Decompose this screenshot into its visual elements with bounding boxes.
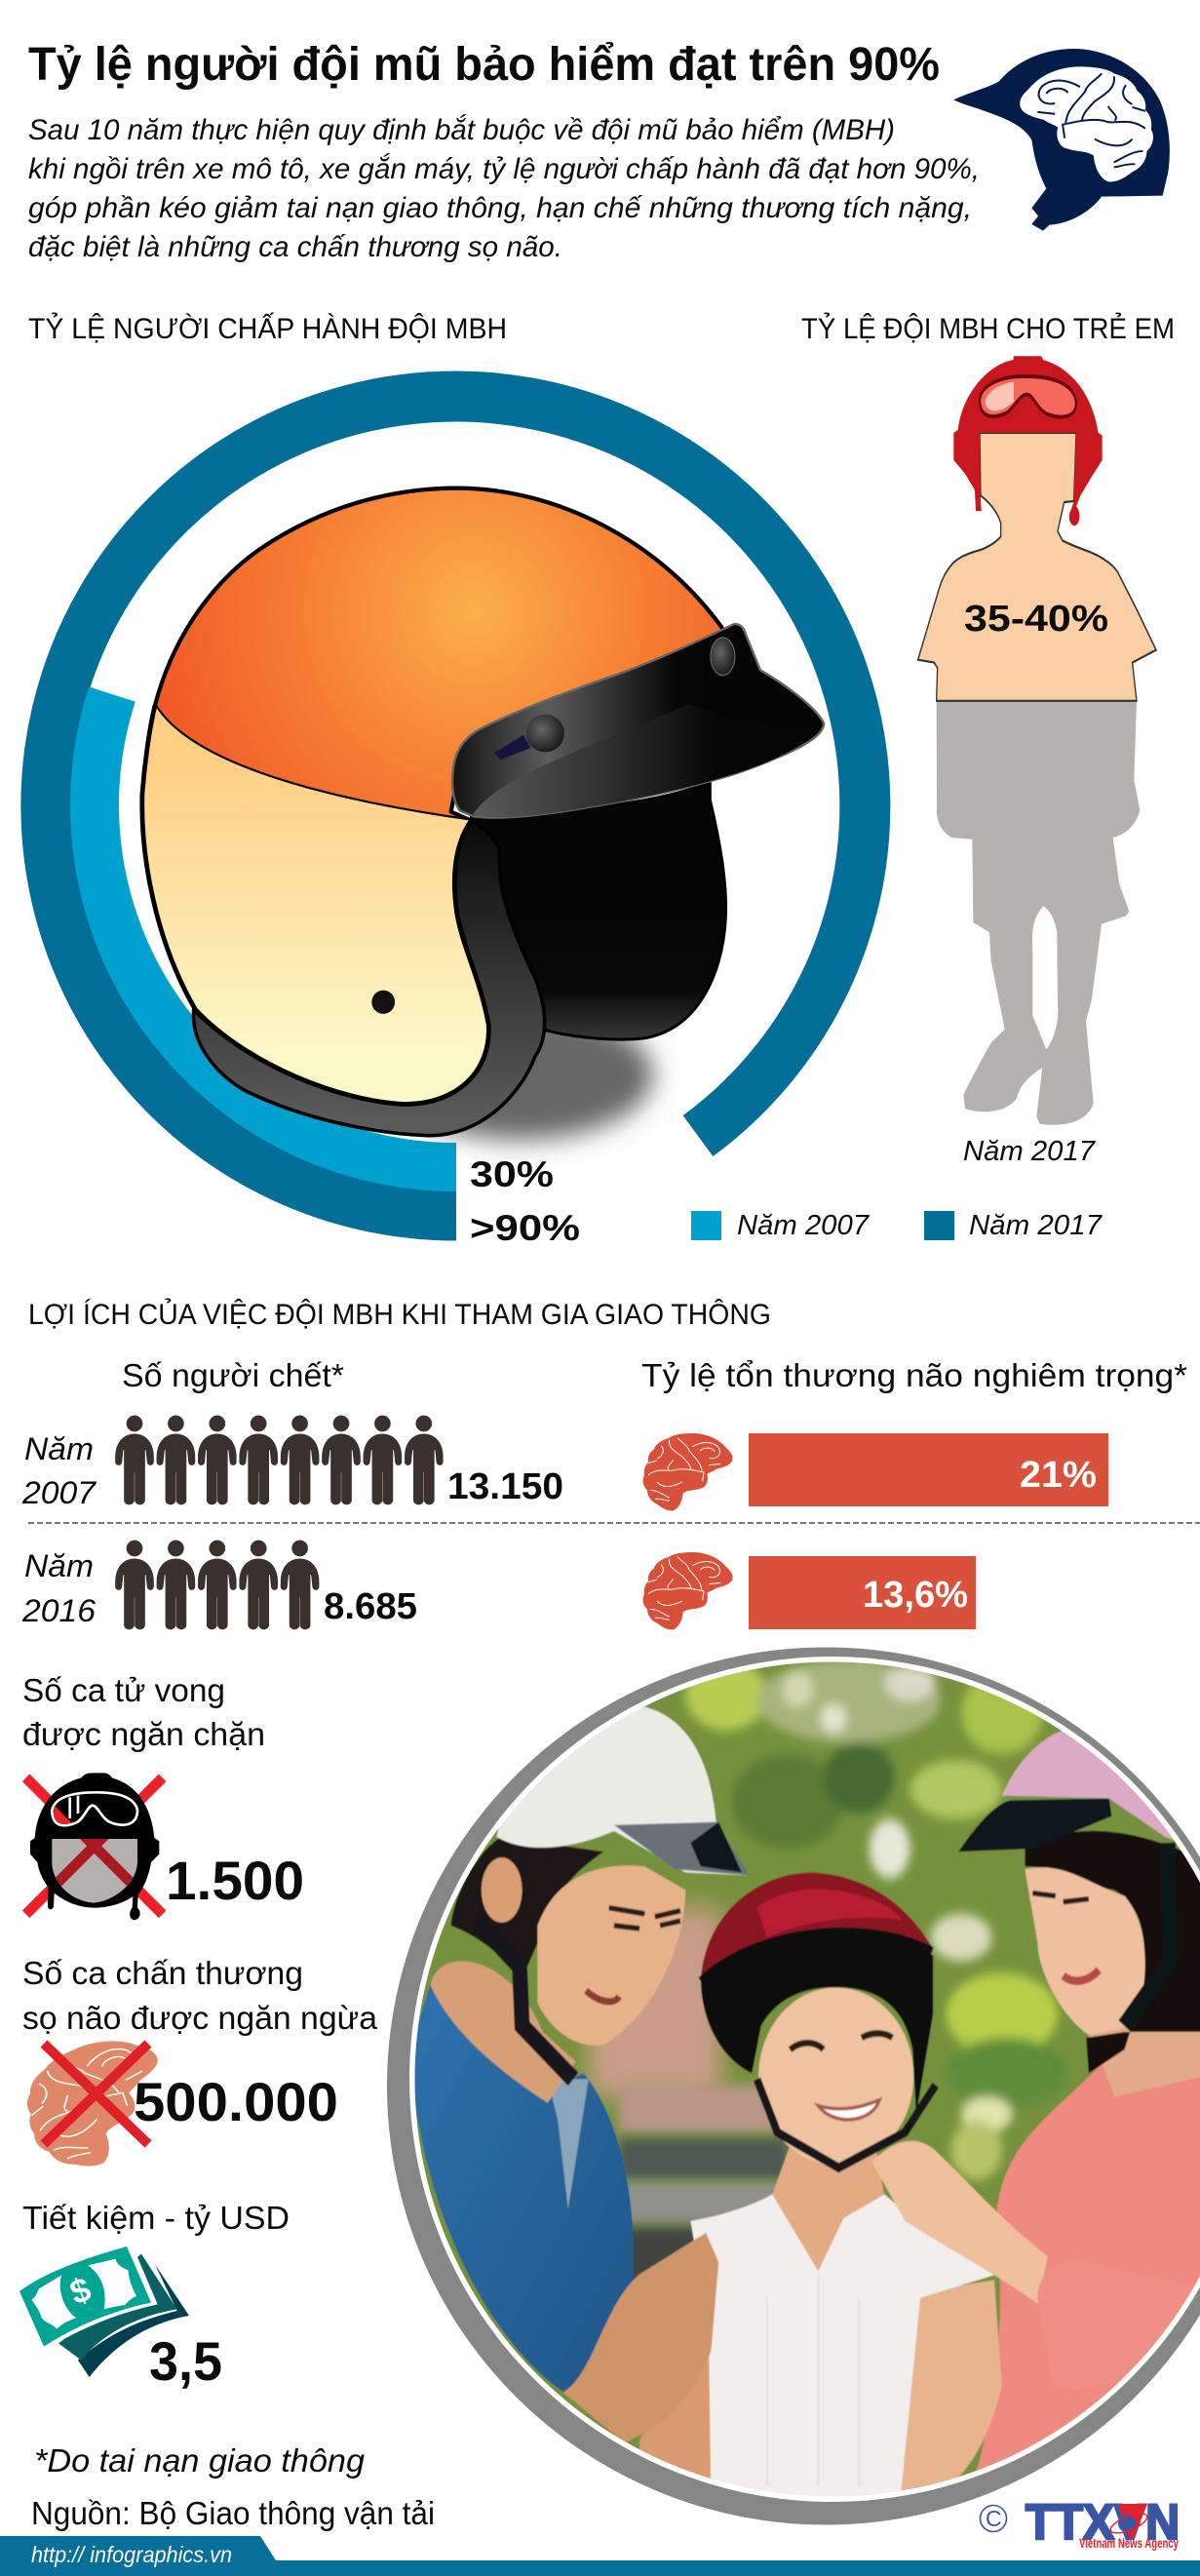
arc: 2007 30%: [95, 694, 456, 1167]
woman sleeve: [1037, 2261, 1200, 2390]
label: year 2007: 2007: [21, 1475, 97, 1510]
heading: brain injuries prevented: sọ não được ngăn ngừa: [22, 2000, 378, 2036]
woman shirt: [976, 2063, 1200, 2471]
value: 8.685: 8.685: [324, 1586, 417, 1627]
value: 500.000: 500.000: [134, 2071, 338, 2132]
label: year 2007: Năm: [24, 1431, 94, 1466]
value: over 90%: >90%: [470, 1208, 580, 1248]
red chevron: [1118, 2504, 1147, 2538]
goggles: [52, 1792, 137, 1825]
man shirt: [409, 1984, 634, 2399]
helmet shadow: [387, 1010, 653, 1140]
bar: 2007 injury rate: [749, 1433, 1108, 1506]
icon: banknotes: [19, 2246, 189, 2377]
woman hair: [1025, 1831, 1200, 2073]
value: 35-40%: 35-40%: [964, 599, 1108, 640]
heading: deaths prevented: [22, 1672, 265, 1752]
man visor: [614, 1822, 750, 1875]
child goggles: [980, 376, 1076, 417]
intro text: khi ngồi trên xe mô tô, xe gắn máy, tỷ lệ người chấp hành đã đạt hơn 90%,: [28, 153, 980, 185]
goggle red lens: [54, 1806, 71, 1824]
goggle highlight: [986, 382, 1014, 410]
woman helmet: [1002, 1730, 1175, 1841]
label: year 2016: 2016: [21, 1593, 96, 1628]
caption: year 2017: Năm 2017: [963, 1136, 1097, 1167]
dollar sign: $: [65, 2270, 96, 2313]
intro text: Sau 10 năm thực hiện quy định bắt buộc về đội mũ bảo hiểm (MBH): [28, 114, 895, 146]
face panel: [52, 1839, 137, 1903]
helmet outline: [142, 706, 488, 1105]
child helmet: [953, 356, 1103, 526]
goggle highlight: [70, 1796, 78, 1818]
footnote: *Do tai nạn giao thông: [34, 2442, 366, 2478]
label: year 2007: [21, 1431, 97, 1510]
value: 21%: 21%: [1020, 1455, 1097, 1496]
man face: [537, 1865, 685, 2046]
globe: [1118, 2515, 1136, 2532]
helmet upper shell: [155, 488, 722, 821]
girl eyes: [791, 2033, 892, 2049]
intro text: góp phần kéo giảm tai nạn giao thông, hạn chế những thương tích nặng,: [28, 192, 972, 224]
man undershirt: [548, 2079, 589, 2209]
icon: brain 2016: [643, 1552, 732, 1629]
woman neck: [1088, 2026, 1200, 2097]
girl dress: [690, 2195, 997, 2505]
man ear: [482, 1857, 523, 1923]
man chin strap: [493, 1948, 579, 2087]
legend label 2017: Năm 2017: [969, 1210, 1103, 1241]
helmet liner: [462, 782, 726, 1039]
red cross: [26, 1777, 163, 1914]
column heading: deaths: Số người chết*: [122, 1357, 344, 1393]
note left panel: [31, 2275, 76, 2329]
source: Nguồn: Bộ Giao thông vận tải: [31, 2495, 435, 2531]
girl helmet dome: [701, 1872, 933, 1978]
heading: brain injuries prevented: [22, 1955, 378, 2036]
intro text: đặc biệt là những ca chấn thương sọ não.: [28, 231, 562, 263]
icon: helmet with brain: [953, 49, 1170, 231]
helmet rim: [193, 821, 545, 1136]
girl right arm: [900, 2281, 1002, 2505]
illustration: orange helmet: [142, 488, 824, 1140]
icon: crossed-out helmet: [26, 1773, 163, 1920]
heading: deaths prevented: được ngăn chặn: [22, 1716, 265, 1752]
legend swatch 2007: [691, 1211, 721, 1240]
child lower body: [937, 701, 1140, 1125]
girl left arm: [639, 2356, 712, 2478]
column heading: brain injury rate: Tỷ lệ tổn thương não nghiêm trọng*: [641, 1357, 1187, 1393]
heading: adherence rate: TỶ LỆ NGƯỜI CHẤP HÀNH ĐỘI MBH: [28, 312, 507, 345]
illustration: child with helmet: [918, 356, 1156, 1125]
globe orbit: [1108, 2510, 1149, 2537]
woman strap: [1125, 1843, 1171, 2026]
heading: deaths prevented: Số ca tử vong: [22, 1672, 225, 1708]
copyright mark: C: [986, 2506, 1002, 2531]
arc: 2017 over 90%: [46, 397, 865, 1216]
girl face: [758, 1988, 913, 2165]
man neck: [430, 1961, 576, 2103]
pictogram: 2007 deaths: [116, 1416, 443, 1504]
agency wordmark: TTXVN: [1026, 2494, 1180, 2550]
woman arm and hand: [871, 2141, 1048, 2304]
label: year 2016: Năm: [24, 1548, 94, 1583]
heading: brain injuries prevented: Số ca chấn thương: [22, 1955, 303, 1991]
bar: 2016 injury rate: [749, 1556, 976, 1629]
icon: brain 2007: [643, 1433, 732, 1510]
visor snap: [711, 638, 735, 676]
man helmet: [496, 1707, 747, 1875]
legend label 2007: Năm 2007: [737, 1210, 871, 1241]
black helmet: [30, 1773, 159, 1920]
label: year 2016: [21, 1548, 96, 1628]
child upper body: [918, 433, 1156, 701]
background railing: [619, 2086, 777, 2132]
pictogram: 2016 deaths: [116, 1541, 319, 1629]
girl neck and collar skin: [772, 2138, 884, 2277]
man features: [609, 1908, 680, 1929]
value: 30%: 30%: [470, 1154, 554, 1194]
visor snap: [526, 715, 564, 752]
second note: [58, 2254, 177, 2361]
woman face: [1025, 1867, 1145, 2035]
photo frame: [387, 1648, 1200, 2525]
visor slot: [494, 735, 530, 760]
heading: benefits: LỢI ÍCH CỦA VIỆC ĐỘI MBH KHI THAM GIA GIAO THÔNG: [28, 1298, 771, 1331]
photo background: [415, 1661, 1181, 2490]
third note: [78, 2264, 189, 2377]
woman features: [1032, 1893, 1089, 1902]
cross over face: [56, 1839, 133, 1887]
value: 3,5: 3,5: [149, 2330, 222, 2392]
helmet visor: [452, 624, 824, 818]
front note: [19, 2246, 151, 2347]
note right panel: [88, 2259, 136, 2309]
heading: children rate: TỶ LỆ ĐỘI MBH CHO TRẺ EM: [801, 312, 1175, 345]
girl helmet band: [704, 1936, 931, 1984]
intro text: [28, 114, 980, 263]
girl chin strap: [757, 2079, 936, 2167]
legend: [691, 1210, 1103, 1241]
man hand: [563, 2233, 718, 2442]
copyright mark: [981, 2506, 1006, 2531]
girl helmet lining: [701, 1937, 933, 2115]
chart: radial adherence rings: [46, 397, 865, 1216]
visor lower band: [473, 704, 821, 817]
legend swatch 2017: [924, 1211, 954, 1240]
helmet lower shell: [143, 706, 488, 1105]
man hair: [450, 1837, 603, 1978]
helmet air vent: [371, 991, 395, 1014]
value: 1.500: 1.500: [166, 1850, 304, 1911]
girl smile: [818, 2100, 879, 2120]
heading: savings: Tiết kiệm - tỷ USD: [22, 2200, 290, 2236]
title: Tỷ lệ người đội mũ bảo hiểm đạt trên 90%: [28, 39, 940, 91]
footer url: http:// infographics.vn: [31, 2542, 232, 2567]
woman visor: [958, 1799, 1111, 1852]
icon: crossed-out brain: [2, 2023, 194, 2182]
footer bar: [0, 2536, 1200, 2576]
value: 13.150: 13.150: [447, 1466, 563, 1507]
photo: family with helmets: [387, 1648, 1200, 2574]
logo: TTXVN: [981, 2494, 1180, 2551]
value: 13,6%: 13,6%: [863, 1575, 968, 1616]
